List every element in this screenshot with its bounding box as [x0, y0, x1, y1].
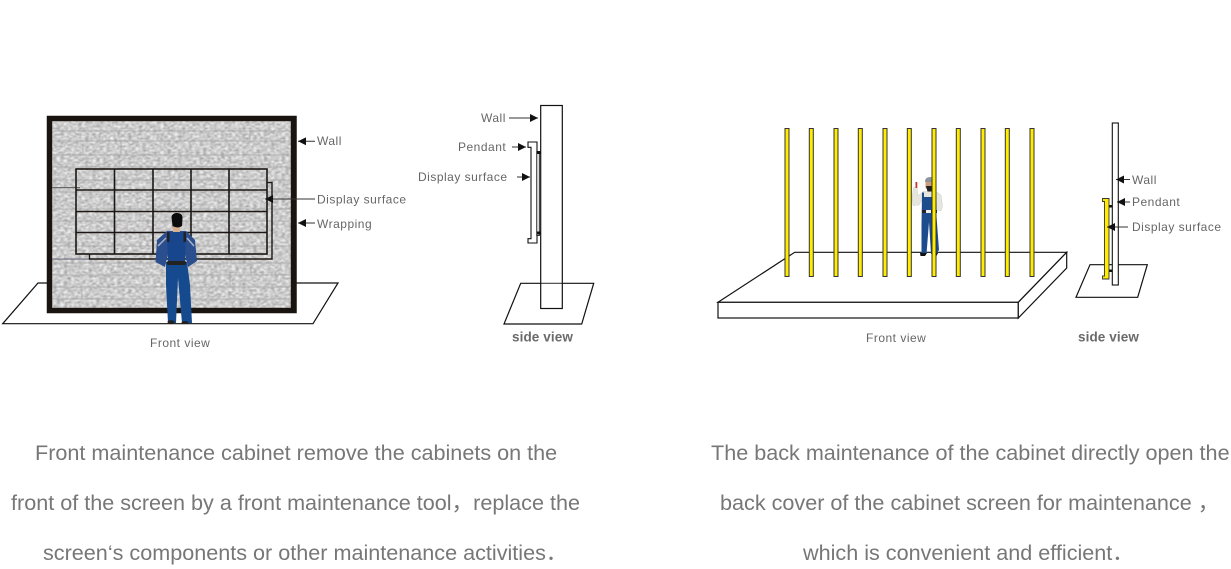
- caption: front view: Front view: [866, 331, 926, 345]
- label: display surface: Display surface: [418, 170, 508, 184]
- left side view diagram: [418, 106, 594, 344]
- caption: side view: side view: [1078, 330, 1139, 344]
- floor plane: [3, 283, 338, 324]
- label: wall: Wall: [481, 111, 506, 125]
- yellow cabinet columns: [785, 128, 1034, 276]
- left description text: [11, 440, 580, 565]
- right front view diagram: [718, 128, 1067, 345]
- label: wall: [1116, 173, 1157, 187]
- right description text: The back maintenance of the cabinet directly open the: [711, 440, 1230, 465]
- floor plane: [1076, 265, 1147, 297]
- worker seen from behind: [156, 213, 197, 324]
- display grid: [76, 169, 267, 254]
- label: wrapping: Wrapping: [317, 217, 372, 231]
- left description text: front of the screen by a front maintenance tool，replace the: [11, 490, 580, 515]
- right description text: back cover of the cabinet screen for maintenance ，: [720, 490, 1219, 515]
- right description text: which is convenient and efficient．: [803, 540, 1134, 565]
- yellow pendant: [1102, 198, 1112, 279]
- wall: [1112, 123, 1118, 285]
- left description text: Front maintenance cabinet remove the cabinets on the: [35, 440, 557, 465]
- caption: side view: side view: [512, 330, 573, 344]
- worker seen from front: [912, 177, 942, 257]
- label: display surface: Display surface: [1132, 220, 1222, 234]
- floor plane: [504, 283, 594, 324]
- wall: [541, 106, 562, 308]
- left description text: screen‘s components or other maintenance activities．: [43, 540, 568, 565]
- label: wall: [298, 134, 342, 148]
- label: display surface: Display surface: [317, 192, 407, 206]
- pendant: [528, 142, 541, 243]
- wall with stone texture: [50, 118, 294, 310]
- left front view diagram: [3, 118, 407, 350]
- label: pendant: Pendant: [458, 140, 506, 154]
- right description text: [711, 440, 1230, 565]
- right side view diagram: [1076, 123, 1222, 344]
- label: wall: Wall: [317, 134, 342, 148]
- wrapping outline: [90, 182, 272, 259]
- caption: front view: Front view: [150, 336, 210, 350]
- label: pendant: Pendant: [1132, 195, 1180, 209]
- platform: [718, 252, 1067, 318]
- label: wall: [481, 111, 538, 125]
- label: wall: Wall: [1132, 173, 1157, 187]
